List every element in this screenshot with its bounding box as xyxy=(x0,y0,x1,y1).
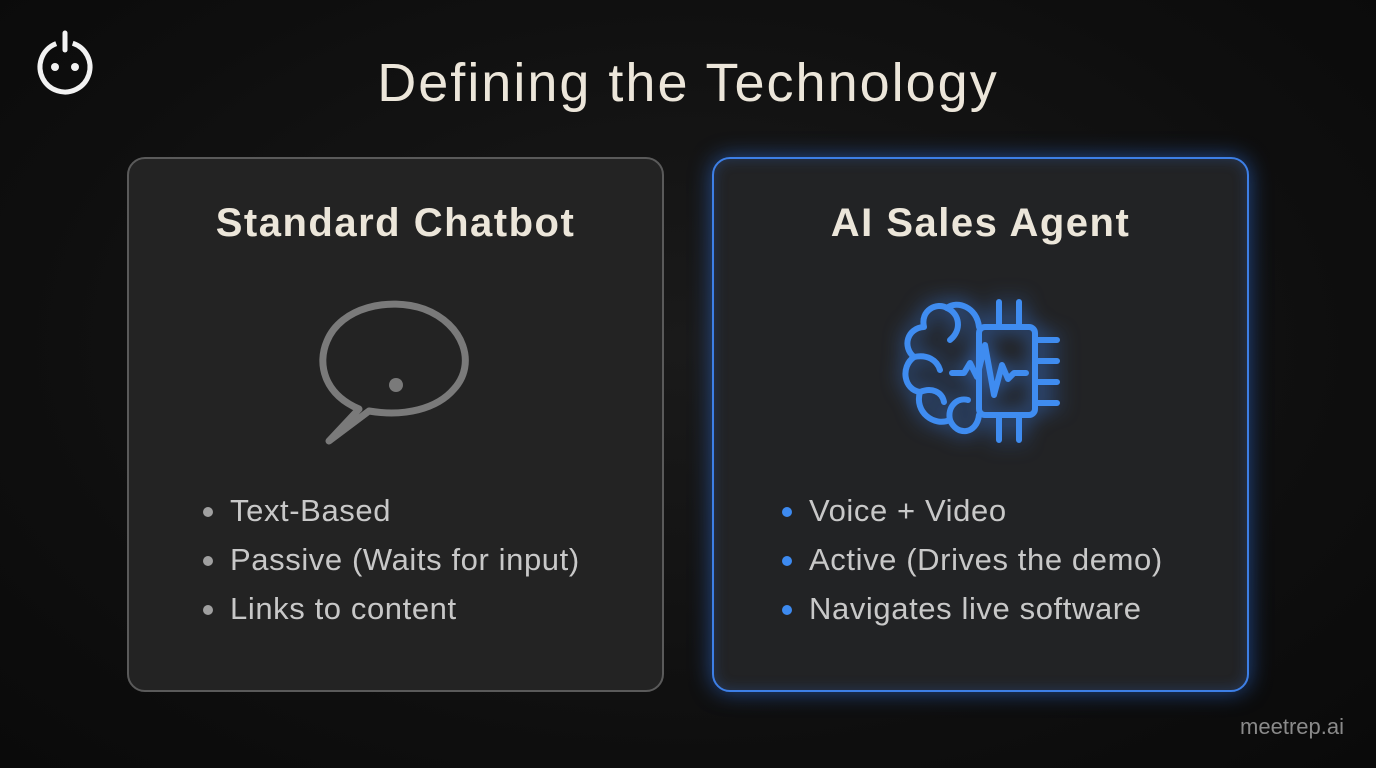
logo: power icon xyxy=(37,30,93,95)
bullet list: Text-Based xyxy=(230,493,391,528)
bullet list: Voice + Video xyxy=(809,493,1007,528)
heading: Standard Chatbot xyxy=(216,201,575,245)
bullet list xyxy=(203,493,580,626)
heading: AI Sales Agent xyxy=(831,201,1130,245)
bullet list: Passive (Waits for input) xyxy=(230,542,580,577)
panel: AI sales agent xyxy=(712,157,1249,692)
bullet list: Active (Drives the demo) xyxy=(809,542,1163,577)
icon: speech bubble xyxy=(319,300,469,444)
title: Defining the Technology xyxy=(377,53,999,113)
panel: standard chatbot xyxy=(127,157,664,692)
bullet list: Links to content xyxy=(230,591,457,626)
icon: brain chip xyxy=(890,288,1068,452)
footer: brand: meetrep.ai xyxy=(1240,714,1344,739)
bullet list xyxy=(782,493,1163,626)
bullet list: Navigates live software xyxy=(809,591,1142,626)
